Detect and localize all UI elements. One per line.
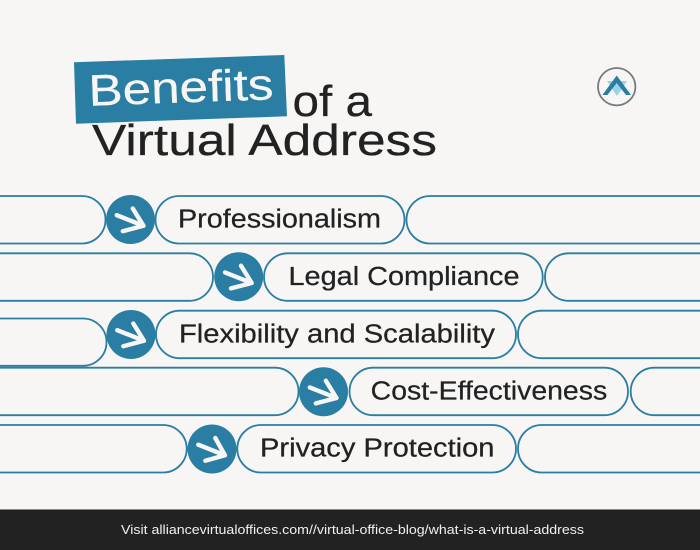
left pill xyxy=(0,368,298,415)
row: Flexibility and Scalability xyxy=(0,310,700,366)
label pill xyxy=(264,253,543,301)
label pill xyxy=(350,368,628,415)
label: Privacy Protection xyxy=(260,435,494,463)
right pill xyxy=(406,196,700,244)
label pill xyxy=(237,425,516,472)
left pill xyxy=(0,196,106,244)
right pill xyxy=(631,368,700,415)
title xyxy=(74,55,437,165)
label pill xyxy=(156,311,516,358)
label: Professionalism xyxy=(178,206,381,234)
title word: Benefits: Benefits xyxy=(88,60,274,116)
title words: of a: of a xyxy=(292,77,373,126)
icon: company logo xyxy=(598,68,635,105)
title highlight banner xyxy=(74,55,287,124)
arrow badge xyxy=(299,367,348,416)
row: Legal Compliance xyxy=(0,252,700,301)
label: Flexibility and Scalability xyxy=(179,321,495,349)
arrow badge xyxy=(106,310,156,359)
label: Cost-Effectiveness xyxy=(371,377,607,405)
left pill xyxy=(0,318,106,366)
right pill xyxy=(518,311,700,358)
arrow badge xyxy=(188,424,236,474)
label: Legal Compliance xyxy=(288,263,520,291)
left pill xyxy=(0,425,187,472)
arrow badge xyxy=(214,252,263,301)
title words: Virtual Address: Virtual Address xyxy=(92,116,437,165)
footer link text: Visit alliancevirtualoffices.com//virtual-office-blog/what-is-a-virtual-address xyxy=(121,522,585,537)
row: Cost-Effectiveness xyxy=(0,367,700,416)
arrow badge xyxy=(106,195,155,244)
footer bar xyxy=(0,510,700,550)
left pill xyxy=(0,253,213,301)
row: Professionalism xyxy=(0,195,700,244)
right pill xyxy=(545,253,700,301)
row: Privacy Protection xyxy=(0,424,700,474)
label pill xyxy=(156,196,404,244)
right pill xyxy=(518,425,700,472)
